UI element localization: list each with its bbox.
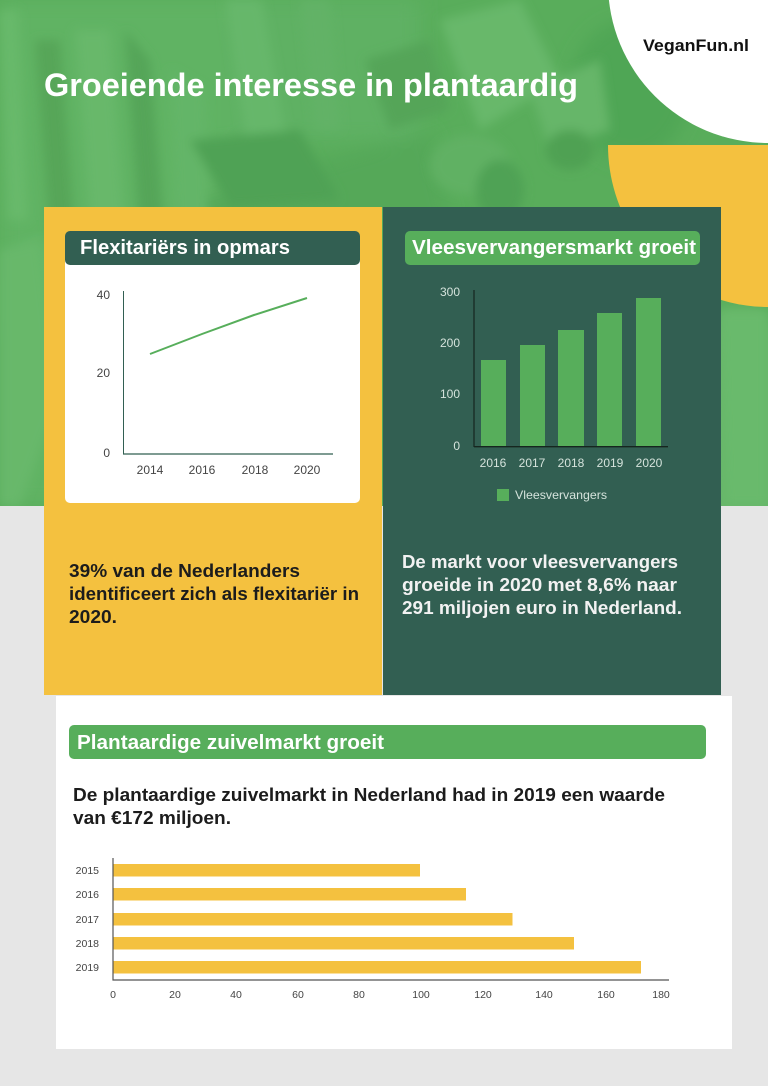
text: market growth: De markt voor vleesvervangers — [402, 552, 678, 572]
panel: flexitarians — [44, 207, 382, 695]
decorative yellow quarter circle — [608, 145, 768, 307]
heading: meat substitutes: Vleesvervangersmarkt groeit — [412, 237, 696, 259]
bar chart: meat substitutes: 2016 — [480, 456, 507, 470]
bar chart: meat substitutes: 2017 — [519, 456, 546, 470]
horizontal bar chart: plant-based dairy: 2015 — [76, 865, 99, 877]
horizontal bar chart: plant-based dairy: 2017 — [76, 914, 99, 926]
heading: flexitarians — [65, 231, 360, 265]
bar chart: meat substitutes: 200 — [440, 336, 460, 350]
horizontal bar chart: plant-based dairy — [76, 858, 670, 1001]
bar chart: meat substitutes: 2018 — [558, 456, 585, 470]
text: flexitarian share — [69, 561, 359, 627]
bar chart: meat substitutes: 100 — [440, 387, 460, 401]
chart card — [65, 240, 360, 503]
legend: Vleesvervangers — [515, 488, 607, 502]
text: dairy market value: De plantaardige zuivelmarkt in Nederland had in 2019 een waarde — [73, 785, 665, 805]
horizontal bar chart: plant-based dairy: 80 — [353, 989, 365, 1001]
horizontal bar chart: plant-based dairy: 40 — [230, 989, 242, 1001]
heading: plant-based dairy — [69, 725, 706, 759]
horizontal bar chart: plant-based dairy: 2016 — [76, 889, 99, 901]
horizontal bar chart: plant-based dairy: 60 — [292, 989, 304, 1001]
line chart: flexitarians: 2020 — [294, 463, 321, 477]
bar chart: meat substitutes: 2020 — [636, 456, 663, 470]
heading: flexitarians: Flexitariërs in opmars — [80, 237, 290, 259]
bar chart: meat substitutes — [440, 285, 668, 470]
line chart: flexitarians: 40 — [97, 288, 110, 302]
heading: plant-based dairy: Plantaardige zuivelmarkt groeit — [77, 732, 384, 754]
text: flexitarian share: identificeert zich als flexitariër in — [69, 584, 359, 604]
line chart: flexitarians: 2016 — [189, 463, 216, 477]
header photo background — [0, 0, 768, 530]
panel: plant-based dairy — [56, 696, 732, 1049]
text: dairy market value: van €172 miljoen. — [73, 808, 231, 828]
line chart: flexitarians: 20 — [97, 366, 110, 380]
brand name: VeganFun.nl — [643, 37, 749, 55]
horizontal bar chart: plant-based dairy: 120 — [474, 989, 492, 1001]
decorative white corner circle — [608, 0, 768, 143]
text: flexitarian share: 39% van de Nederlanders — [69, 561, 300, 581]
horizontal bar chart: plant-based dairy: 140 — [535, 989, 553, 1001]
text: dairy market value — [73, 785, 665, 828]
line chart: flexitarians: 0 — [103, 446, 110, 460]
line chart: flexitarians: 2014 — [137, 463, 164, 477]
text: market growth: groeide in 2020 met 8,6% naar — [402, 575, 677, 595]
heading: meat substitutes — [405, 231, 700, 265]
panel: meat substitutes — [383, 207, 721, 695]
bar chart: meat substitutes: 0 — [453, 439, 460, 453]
horizontal bar chart: plant-based dairy: 20 — [169, 989, 181, 1001]
bar chart: meat substitutes: 2019 — [597, 456, 624, 470]
text: market growth — [402, 552, 682, 618]
horizontal bar chart: plant-based dairy: 180 — [652, 989, 670, 1001]
bar chart: meat substitutes: 300 — [440, 285, 460, 299]
line chart: flexitarians: 2018 — [242, 463, 269, 477]
horizontal bar chart: plant-based dairy: 0 — [110, 989, 116, 1001]
title: Groeiende interesse in plantaardig — [44, 67, 578, 103]
text: market growth: 291 miljojen euro in Nederland. — [402, 598, 682, 618]
horizontal bar chart: plant-based dairy: 160 — [597, 989, 615, 1001]
horizontal bar chart: plant-based dairy: 2018 — [76, 938, 99, 950]
text: flexitarian share: 2020. — [69, 607, 117, 627]
horizontal bar chart: plant-based dairy: 100 — [412, 989, 430, 1001]
line chart: flexitarians — [97, 288, 333, 477]
horizontal bar chart: plant-based dairy: 2019 — [76, 962, 99, 974]
